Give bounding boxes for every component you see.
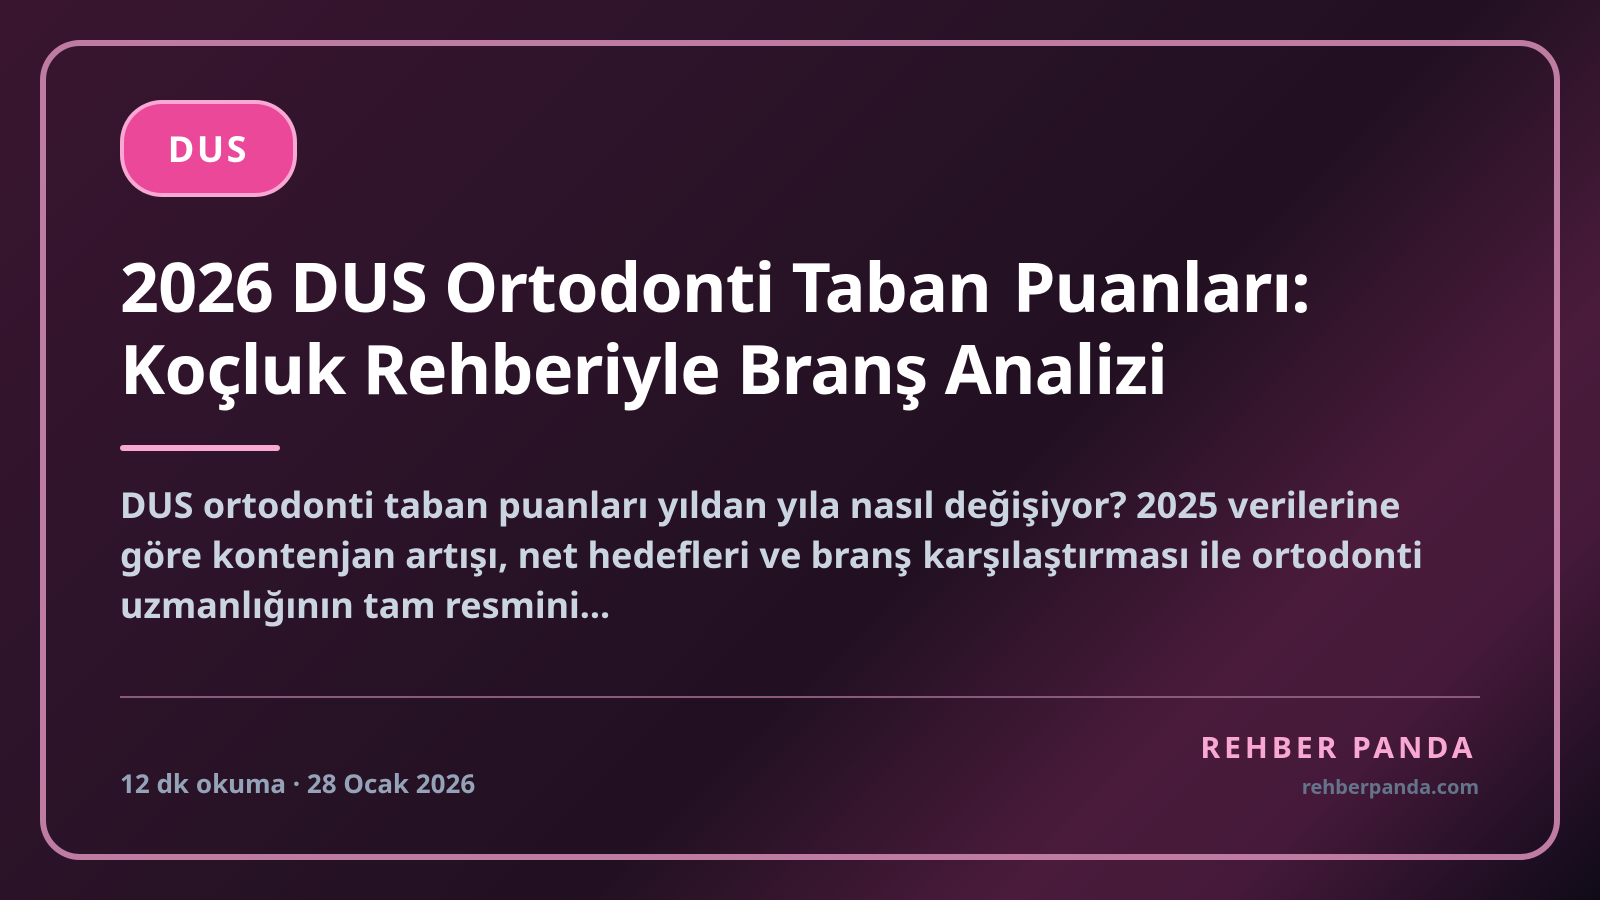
- description: uzmanlığının tam resmini...: [120, 580, 610, 629]
- description: DUS ortodonti taban puanları yıldan yıla nasıl değişiyor? 2025 verilerine: [120, 480, 1401, 529]
- brand name: REHBER PANDA: [1200, 726, 1476, 767]
- category badge: DUS: [168, 124, 249, 173]
- reading time and date: 12 dk okuma · 28 Ocak 2026: [120, 765, 475, 801]
- description: göre kontenjan artışı, net hedefleri ve branş karşılaştırması ile ortodonti: [120, 530, 1423, 579]
- description: [120, 480, 1423, 629]
- title: 2026 DUS Ortodonti Taban Puanları:: [120, 239, 1310, 332]
- category badge: [120, 100, 297, 197]
- divider: [120, 696, 1480, 698]
- website: rehberpanda.com: [1302, 773, 1479, 800]
- title: Koçluk Rehberiyle Branş Analizi: [120, 321, 1167, 414]
- accent bar: [120, 445, 280, 451]
- title: [120, 239, 1310, 414]
